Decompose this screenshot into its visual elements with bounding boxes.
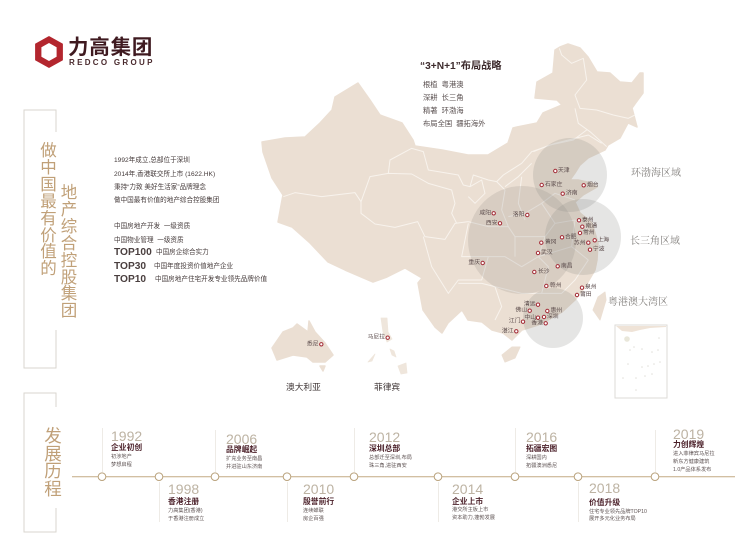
region circle: Yangtze River Delta xyxy=(545,199,621,275)
northeast borders xyxy=(533,48,635,152)
heading: development history: 程 xyxy=(44,478,62,498)
heading: development history: 发 xyxy=(44,426,62,446)
city labels left side xyxy=(307,208,586,347)
city labels right side: 长沙 xyxy=(538,267,550,275)
strategy heading: “3+N+1”布局战略 xyxy=(420,61,502,72)
milestone: 2019: 新东方健康建筑 xyxy=(673,459,709,465)
city labels right side: 南昌 xyxy=(561,261,573,269)
city labels right side: 泰州 xyxy=(582,215,594,223)
city labels right side: 天津 xyxy=(558,167,570,174)
city labels right side: 常州 xyxy=(583,228,595,236)
ranking: top 100 xyxy=(114,247,209,258)
milestone: 1998: 力高集团(香港) xyxy=(168,508,203,514)
milestone: 2014: 2014 xyxy=(452,481,483,497)
milestone: 2014: 资本助力,蓬勃发展 xyxy=(452,515,495,521)
city labels left side: 西安 xyxy=(486,218,498,226)
city labels left side: 咸阳 xyxy=(479,208,491,216)
ranking: top 30: TOP30 xyxy=(114,261,146,272)
label: Philippines: 菲律宾 xyxy=(374,382,400,392)
city labels right side: 泉州 xyxy=(585,283,597,291)
milestone: 1998: 1998 xyxy=(168,481,199,497)
milestone: 2010: 2010 xyxy=(303,481,334,497)
ranking: top 10: 中国房地产住宅开发专业领先品牌价值 xyxy=(155,276,267,283)
heading: positioning line two: 地 xyxy=(61,184,77,202)
ranking: top 100: 中国房企综合实力 xyxy=(156,249,209,256)
region circle: Bohai Rim xyxy=(533,138,607,212)
heading: positioning line one: 值 xyxy=(40,243,57,261)
region label: Yangtze River Delta: 长三角区域 xyxy=(630,236,680,247)
heading: positioning line two: 团 xyxy=(61,302,77,320)
logo chinese name: 力高集团 xyxy=(68,36,153,59)
heading: positioning line one: 中 xyxy=(40,159,57,177)
label: Australia: 澳大利亚 xyxy=(286,382,321,392)
milestone: 2019: 力创辉煌 xyxy=(673,440,704,449)
milestone: 2019 xyxy=(655,430,706,472)
philippines xyxy=(368,318,407,374)
map: China and overseas xyxy=(261,43,644,374)
heading: positioning line one: 做 xyxy=(40,142,57,160)
heading: positioning line one: 价 xyxy=(40,227,57,245)
milestone: 2006: 2006 xyxy=(226,431,257,447)
bracket frame: history xyxy=(24,392,56,532)
heading: positioning line one: 有 xyxy=(40,210,57,228)
city labels right side: 惠州 xyxy=(550,306,562,314)
strategy list: 深耕 长三角 xyxy=(423,93,464,102)
milestone: 2012: 深圳总部 xyxy=(369,444,400,453)
text block: company introduction: 秉持“力致 美好生活家”品牌理念 xyxy=(114,184,206,191)
heading: development history: 历 xyxy=(44,461,62,481)
milestone: 2006: 扩充业务至南昌 xyxy=(226,456,262,462)
ranking: top 100: TOP100 xyxy=(114,247,152,258)
city labels left side: 江门 xyxy=(509,317,521,325)
milestone: 2012: 2012 xyxy=(369,429,400,445)
milestone: 2010: 房企百强 xyxy=(303,516,324,522)
text block: company introduction xyxy=(114,156,267,285)
milestone: 2012: 总部迁至深圳,布局 xyxy=(369,455,412,461)
city labels left side: 重庆 xyxy=(468,258,480,266)
milestone: 2016: 拓疆澳洲悉尼 xyxy=(526,463,557,469)
milestone: 2016: 深耕国内 xyxy=(526,455,547,461)
heading: positioning line two: 股 xyxy=(61,269,77,287)
text block: company introduction: 中国房地产开发 一级资质 xyxy=(114,223,190,230)
strategy list: 精著 环渤海 xyxy=(423,106,464,115)
milestone: 1998: 香港注册 xyxy=(168,497,199,506)
text block: company introduction: 1992年成立,总部位于深圳 xyxy=(114,157,190,164)
city labels right side: 南通 xyxy=(586,222,597,230)
milestone: 2006 xyxy=(215,430,266,472)
city labels left side: 洛阳 xyxy=(513,210,525,218)
milestone: 2010: 殷誉前行 xyxy=(303,497,334,506)
heading: positioning line one xyxy=(40,142,57,278)
timeline axis with nodes xyxy=(72,472,735,481)
text block: company introduction: 2014年,香港联交所上市 (1622.HK) xyxy=(114,171,215,178)
milestone: 2010: 连续蝉联 xyxy=(303,508,324,514)
city labels left side: 香港 xyxy=(531,318,543,326)
region circle: central China xyxy=(468,186,576,294)
heading: positioning line two: 综 xyxy=(61,218,77,236)
heading: positioning line two: 集 xyxy=(61,285,77,303)
city labels right side: 石家庄 xyxy=(545,180,563,188)
city labels right side: 济南 xyxy=(566,189,578,197)
heading: positioning line two xyxy=(61,184,77,320)
heading: positioning line one: 国 xyxy=(40,176,57,194)
milestone: 1992: 企业初创 xyxy=(111,443,142,452)
city labels right side: 宁波 xyxy=(593,245,605,253)
milestone: 1998 xyxy=(159,482,210,522)
city labels right side: 上海 xyxy=(598,235,609,243)
heading: development history: 展 xyxy=(44,444,62,464)
heading: development history xyxy=(44,426,62,498)
milestone: 2019: 进入菲律宾马尼拉 xyxy=(673,451,715,457)
bracket frame: positioning xyxy=(24,110,56,368)
city labels left side: 清远 xyxy=(524,300,536,308)
logo: Redco Group xyxy=(35,36,155,68)
strategy list xyxy=(423,80,486,128)
milestone: 2018: 展开多元化业务布局 xyxy=(589,516,636,522)
milestone: 2014: 企业上市 xyxy=(452,497,483,506)
milestone: 2018: 价值升级 xyxy=(589,498,620,507)
icon: red hexagon xyxy=(35,36,63,68)
milestone: 2010 xyxy=(287,482,338,522)
milestone: 2019: 1.0产品体系发布 xyxy=(673,467,711,473)
city labels right side: 合肥 xyxy=(565,232,577,240)
city labels left side: 中山 xyxy=(524,313,536,321)
milestone: 1992 xyxy=(102,428,153,472)
ranking: top 10 xyxy=(114,274,267,285)
taiwan xyxy=(593,292,606,320)
city labels left side: 湛江 xyxy=(502,327,514,334)
region circle: Greater Bay Area xyxy=(523,288,583,348)
city labels right side: 深圳 xyxy=(547,312,559,320)
hainan xyxy=(502,347,520,362)
milestone: 2016: 2016 xyxy=(526,429,557,445)
city labels left side: 悉尼 xyxy=(307,339,319,347)
milestone: 2016: 拓疆宏图 xyxy=(526,444,557,453)
inset map: South China Sea xyxy=(614,324,668,398)
city labels right side xyxy=(538,167,609,320)
city labels left side: 马尼拉 xyxy=(368,333,385,341)
city labels right side: 武汉 xyxy=(541,248,553,256)
city labels right side: 莆田 xyxy=(580,290,592,298)
milestone: 1992: 初涉地产 xyxy=(111,454,132,460)
city labels left side: 佛山 xyxy=(515,306,527,314)
ranking: top 30: 中国年度投资价值地产企业 xyxy=(154,263,233,270)
city markers xyxy=(320,169,596,346)
milestone: 1998: 于香港注册成立 xyxy=(168,516,204,522)
city labels left side: 苏州 xyxy=(574,238,586,246)
milestone: 2016 xyxy=(515,428,566,472)
provincial borders xyxy=(283,135,602,320)
ranking: top 10: TOP10 xyxy=(114,274,146,285)
heading: positioning line one: 最 xyxy=(40,193,57,211)
strategy list: 根植 粤港澳 xyxy=(423,80,464,89)
milestone: 2018: 2018 xyxy=(589,480,620,496)
australia xyxy=(272,321,333,371)
milestone: 2019: 2019 xyxy=(673,426,704,442)
milestone: 2014 xyxy=(438,482,489,522)
city labels right side: 烟台 xyxy=(587,180,599,188)
milestone: 2012 xyxy=(354,428,405,472)
milestone: 1992: 1992 xyxy=(111,428,142,444)
city labels right side: 黄冈 xyxy=(545,238,557,246)
logo english name: REDCO GROUP xyxy=(69,58,155,67)
milestone: 2006: 品牌崛起 xyxy=(226,445,257,454)
heading: positioning line two: 合 xyxy=(61,235,77,253)
ranking: top 30 xyxy=(114,261,233,272)
milestone: 2014: 港交所主板上市 xyxy=(452,507,488,513)
milestone: 1992: 梦想启程 xyxy=(111,462,132,468)
strategy list: 布局全国 疆拓海外 xyxy=(423,119,485,128)
text block: company introduction: 中国物业管理 一级资质 xyxy=(114,237,184,244)
text block: company introduction: 做中国最有价值的地产综合控股集团 xyxy=(114,197,220,204)
milestone: 2012: 珠三角,进驻西安 xyxy=(369,463,407,469)
heading: positioning line one: 的 xyxy=(40,260,57,278)
heading: positioning line two: 控 xyxy=(61,252,77,270)
city labels right side: 赣州 xyxy=(550,281,562,289)
heading: positioning line two: 产 xyxy=(61,201,77,219)
china landmass xyxy=(262,44,643,340)
milestone: 2006: 并进驻山东济南 xyxy=(226,464,262,470)
region label: Bohai Rim: 环渤海区域 xyxy=(631,168,681,179)
region label: Greater Bay Area: 粤港澳大湾区 xyxy=(608,297,668,308)
milestone: 2018: 住宅专业领先品牌TOP10 xyxy=(589,509,647,515)
milestone: 2018 xyxy=(578,482,629,522)
